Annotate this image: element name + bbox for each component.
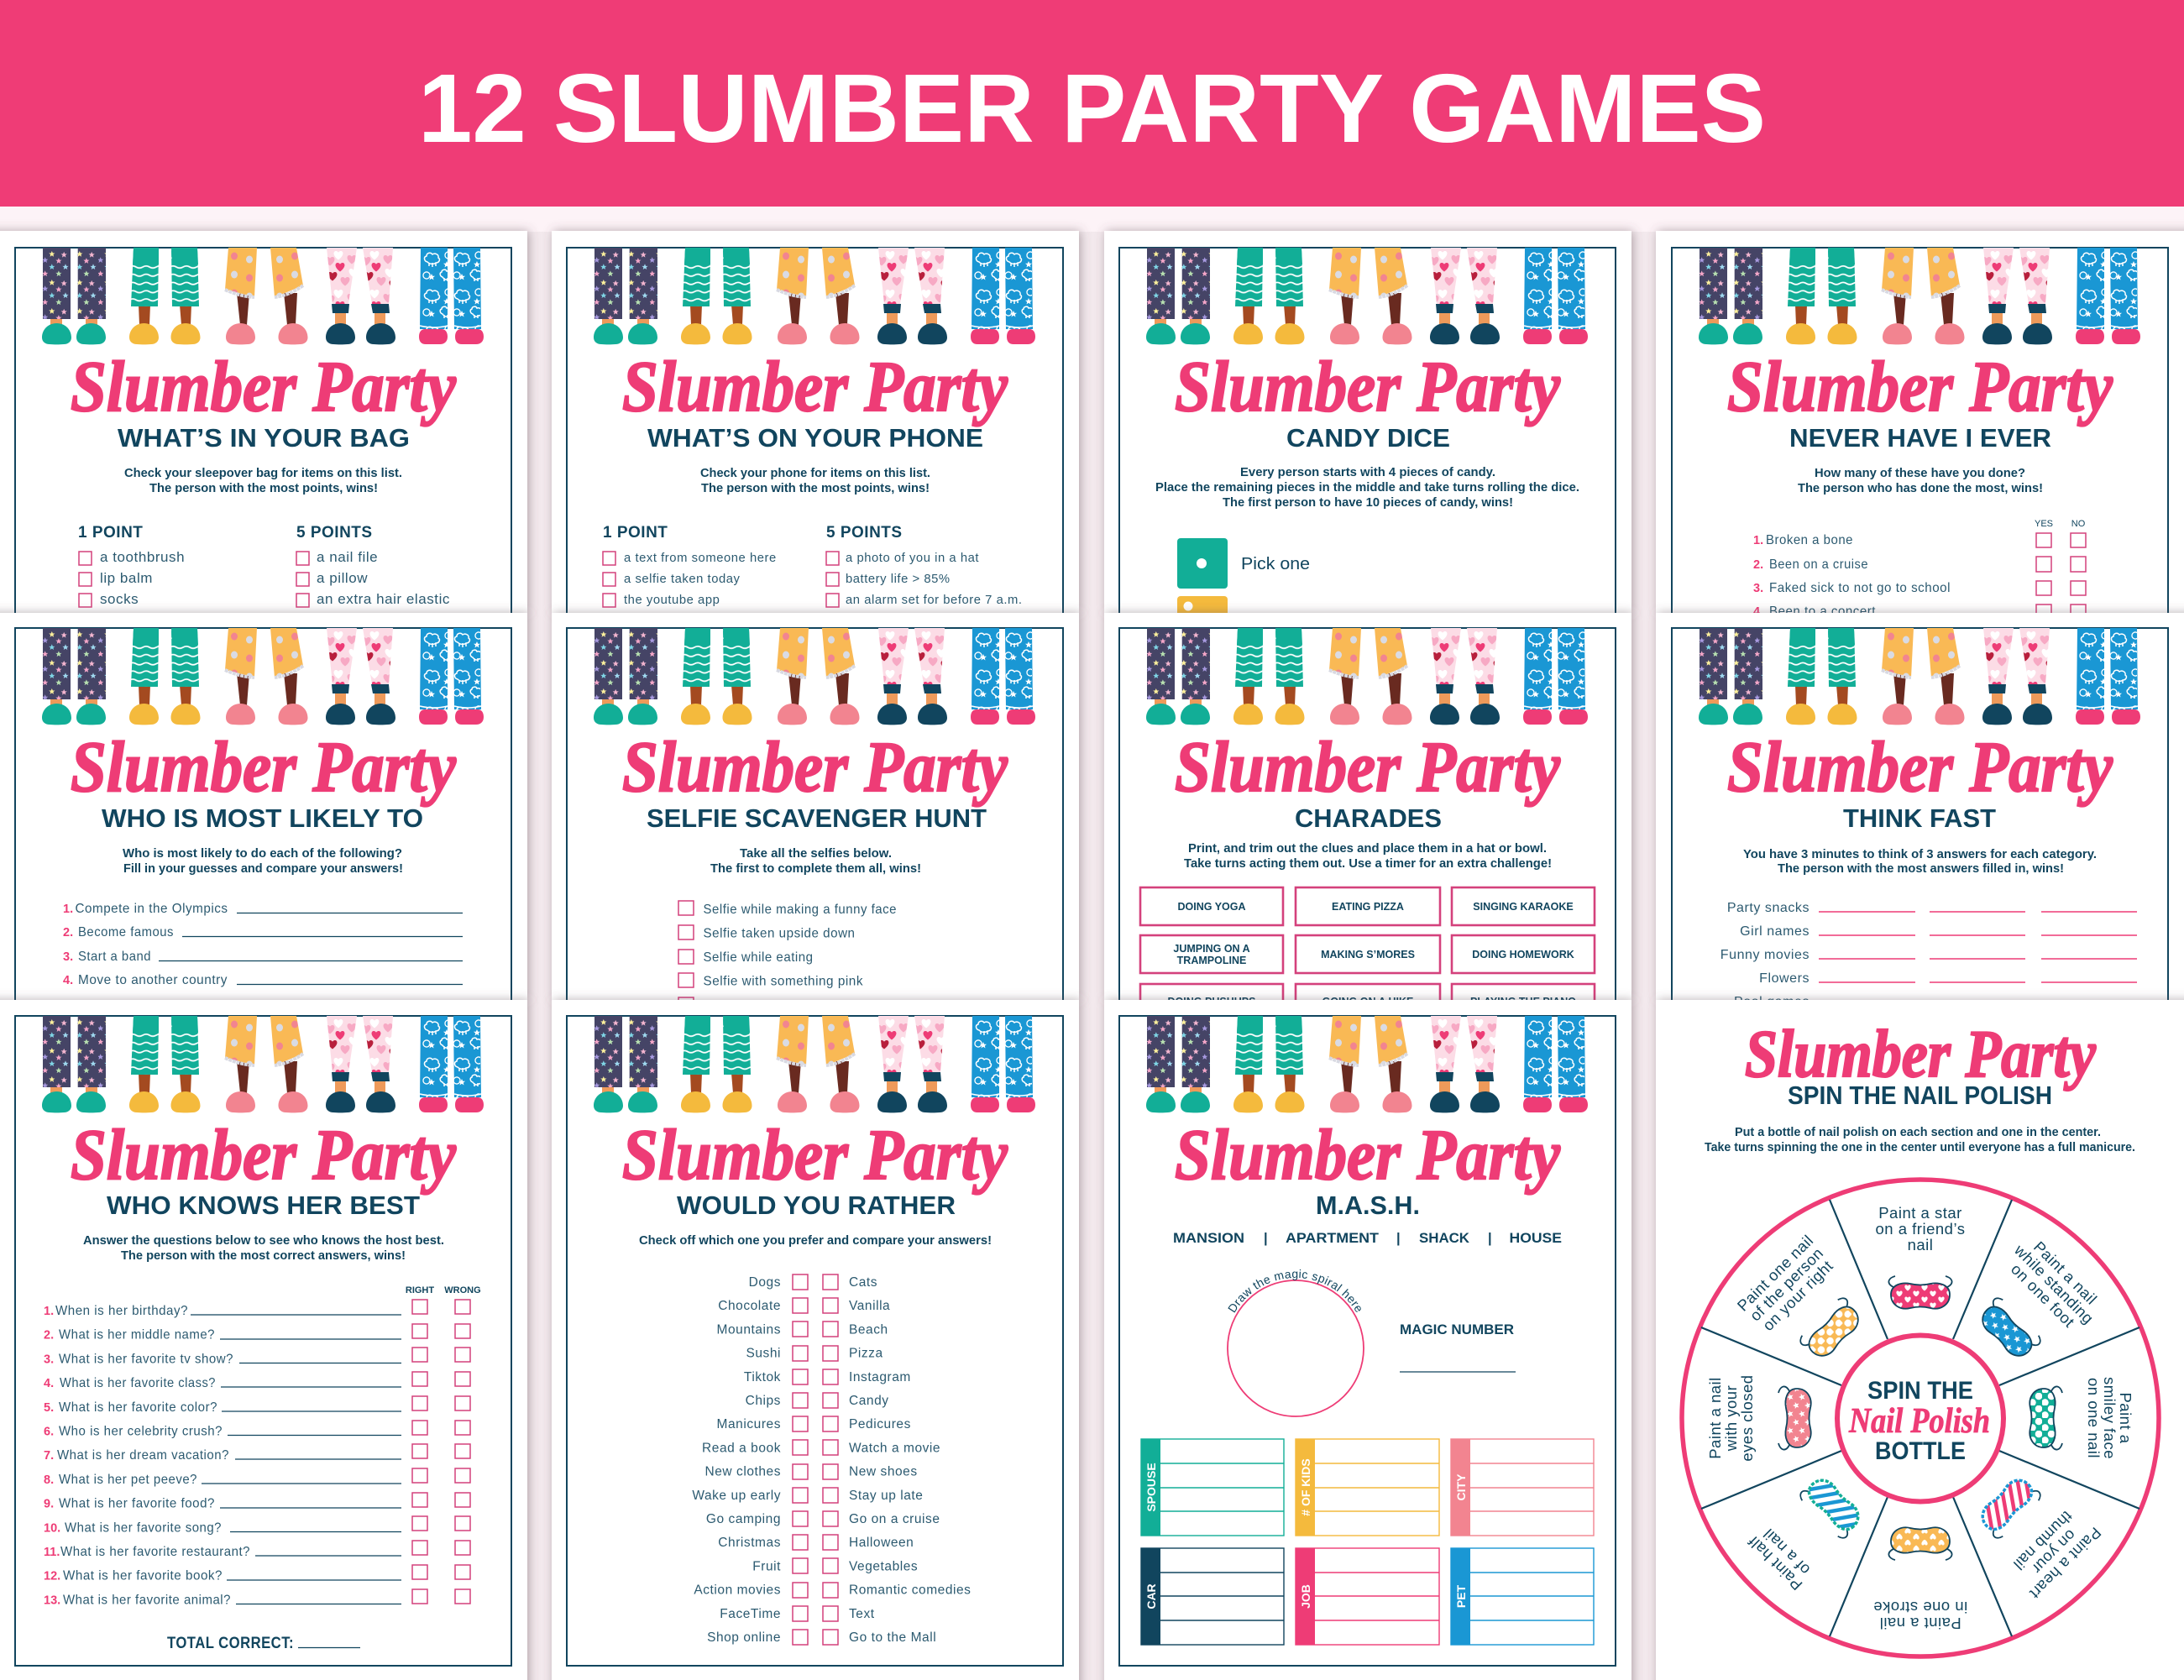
instructions: How many of these have you done? xyxy=(1815,467,2025,480)
slice: paint a smiley: on one nail xyxy=(2085,1378,2103,1458)
magic number xyxy=(1400,1322,1516,1372)
fill-in list: 4. xyxy=(63,974,73,987)
script title: Slumber Party xyxy=(71,346,457,427)
question list: 8. xyxy=(44,1473,54,1487)
instructions: Check off which one you prefer and compare your answers! xyxy=(639,1234,992,1248)
panel: who is most likely to xyxy=(0,613,527,1003)
clue cards: DOING PUSHUPS xyxy=(1168,996,1255,1007)
fill-in list: Compete in the Olympics xyxy=(76,902,228,916)
question list: What is her favorite class? xyxy=(60,1376,216,1390)
question list: 10. xyxy=(44,1521,60,1535)
slice: eyes closed: eyes closed xyxy=(1738,1374,1756,1462)
script title: Slumber Party xyxy=(622,346,1008,427)
question list: 5. xyxy=(44,1401,54,1415)
this-or-that list: Chips xyxy=(746,1394,781,1408)
pajama legs illustration xyxy=(594,628,1035,725)
slice: paint a star xyxy=(1876,1204,1965,1309)
script title: Slumber Party xyxy=(1727,346,2113,427)
instructions xyxy=(1798,467,2043,495)
clue cards: GOING ON A HIKE xyxy=(1322,996,1413,1007)
script title: Slumber Party xyxy=(1175,1114,1561,1195)
instructions xyxy=(123,847,403,876)
instructions: The person with the most correct answers, wins! xyxy=(121,1249,406,1263)
checklist: 5 points: battery life > 85% xyxy=(846,573,951,586)
script title: Slumber Party xyxy=(622,726,1008,807)
question list: 7. xyxy=(44,1449,54,1463)
question list: 1. xyxy=(44,1305,54,1318)
question list: 3. xyxy=(44,1353,54,1366)
question list: 13. xyxy=(44,1594,60,1607)
checklist: Selfie while making a funny face xyxy=(704,903,897,917)
pajama legs illustration xyxy=(594,1016,1035,1112)
slice: paint a star: nail xyxy=(1908,1236,1933,1253)
checklist: 5 points: 5 POINTS xyxy=(296,524,373,542)
panel: mash xyxy=(1100,994,1639,1680)
magic spiral circle: Draw the magic spiral here xyxy=(1228,1269,1361,1313)
clue cards: PLAYING THE PIANO xyxy=(1470,996,1576,1007)
instructions xyxy=(1705,1126,2135,1154)
instructions: The person who has done the most, wins! xyxy=(1798,482,2043,495)
this-or-that list: Go to the Mall xyxy=(849,1630,936,1645)
this-or-that list: Shop online xyxy=(707,1630,781,1645)
slice: paint half: of a nail xyxy=(1760,1526,1813,1578)
yes/no checklist: 4. xyxy=(1753,605,1763,619)
this-or-that list: Go on a cruise xyxy=(849,1512,940,1526)
checklist: Selfie with something pink xyxy=(704,974,863,989)
question list xyxy=(44,1300,470,1607)
fill-in list: Start a band xyxy=(78,950,151,964)
heading: NEVER HAVE I EVER xyxy=(1789,423,2051,453)
yes/no checklist: 1. xyxy=(1753,534,1763,547)
instructions: Every person starts with 4 pieces of candy. xyxy=(1240,466,1495,479)
checklist: 1 point: 1 POINT xyxy=(78,524,143,542)
instructions: Answer the questions below to see who knows the host best. xyxy=(83,1234,444,1248)
panel: would you rather xyxy=(552,1000,1079,1680)
checklist: 5 points: 5 POINTS xyxy=(826,524,903,542)
table: spouse xyxy=(1141,1439,1284,1536)
this-or-that list: Watch a movie xyxy=(849,1441,940,1455)
checklist: 1 point: lip balm xyxy=(100,570,153,586)
clue cards: SINGING KARAOKE xyxy=(1473,901,1574,913)
slice: paint while standing: while standing xyxy=(2010,1240,2098,1327)
wheel center: BOTTLE xyxy=(1875,1437,1966,1465)
yes/no checklist: Broken a bone xyxy=(1766,533,1853,547)
wheel center: Nail Polish xyxy=(1848,1402,1990,1441)
slice: paint while standing: on one foot xyxy=(2008,1260,2078,1331)
fill-in list: 1. xyxy=(63,903,73,916)
clue cards: JUMPING ON A xyxy=(1173,943,1250,955)
title: 12 SLUMBER PARTY GAMES xyxy=(418,54,1766,163)
table: pet: PET xyxy=(1454,1584,1468,1608)
question list: 9. xyxy=(44,1498,54,1511)
question list: What is her favorite tv show? xyxy=(59,1352,233,1366)
slice: paint a smiley: smiley face xyxy=(2101,1377,2119,1459)
this-or-that list: Fruit xyxy=(752,1559,781,1573)
fill-in list xyxy=(63,902,463,987)
this-or-that list: Go camping xyxy=(706,1512,781,1526)
checklist: 1 point xyxy=(603,524,777,607)
category rows: Flowers xyxy=(1759,971,1810,986)
panel: selfie scavenger hunt xyxy=(552,613,1079,1012)
question list: What is her favorite color? xyxy=(59,1400,217,1415)
question list: What is her favorite song? xyxy=(65,1520,222,1535)
heading: WOULD YOU RATHER xyxy=(677,1191,956,1220)
heading: WHAT’S IN YOUR BAG xyxy=(118,423,410,453)
slice: paint while standing: Paint a nail xyxy=(2030,1238,2101,1308)
heading: SELFIE SCAVENGER HUNT xyxy=(647,803,987,833)
checklist: 1 point: 1 POINT xyxy=(603,524,668,542)
script title: Slumber Party xyxy=(1745,1018,2096,1091)
script title: Slumber Party xyxy=(1175,346,1561,427)
pajama legs illustration xyxy=(1146,248,1588,344)
table: # of kids xyxy=(1296,1439,1439,1536)
magic number: MAGIC NUMBER xyxy=(1400,1322,1514,1337)
slice: paint one nail: on your right xyxy=(1759,1257,1836,1334)
question list: What is her middle name? xyxy=(59,1328,215,1342)
fill-in list: 2. xyxy=(63,926,73,939)
pajama legs illustration xyxy=(594,248,1035,344)
slice: paint a heart: thumb nail xyxy=(2010,1508,2076,1573)
panel: who knows her best xyxy=(0,1000,527,1680)
instructions: Fill in your guesses and compare your answers! xyxy=(123,862,403,876)
slice: paint a star: Paint a star xyxy=(1878,1204,1962,1222)
slice: paint a heart: on your xyxy=(2029,1526,2080,1578)
heading: CHARADES xyxy=(1295,803,1442,833)
pajama legs illustration xyxy=(1146,628,1588,725)
fill-in list: Become famous xyxy=(78,925,174,939)
this-or-that list: Candy xyxy=(849,1394,889,1408)
instructions xyxy=(83,1234,444,1263)
instructions: Take turns acting them out. Use a timer for an extra challenge! xyxy=(1184,857,1552,871)
this-or-that list: New clothes xyxy=(705,1465,781,1479)
slice: paint one nail: of the person xyxy=(1747,1244,1826,1324)
panel: spin the nail polish xyxy=(1656,1000,2184,1680)
this-or-that list: Christmas xyxy=(718,1536,781,1550)
checklist: 5 points xyxy=(826,524,1023,607)
checklist: 5 points: an alarm set for before 7 a.m. xyxy=(846,594,1023,607)
instructions xyxy=(1155,466,1579,510)
this-or-that list xyxy=(692,1274,971,1645)
slice: paint a star: on a friend’s xyxy=(1876,1220,1965,1238)
slice: eyes closed: with your xyxy=(1722,1385,1740,1452)
slice: paint a smiley: Paint a xyxy=(2117,1392,2134,1444)
pajama legs illustration xyxy=(42,248,484,344)
instructions: Take all the selfies below. xyxy=(740,847,892,861)
heading: WHO IS MOST LIKELY TO xyxy=(102,803,423,833)
category rows xyxy=(1720,901,2137,1009)
pajama legs illustration xyxy=(1699,248,2140,344)
instructions: The first to complete them all, wins! xyxy=(710,862,921,876)
this-or-that list: Chocolate xyxy=(718,1299,781,1313)
instructions: Place the remaining pieces in the middle and take turns rolling the dice. xyxy=(1155,481,1579,495)
this-or-that list: Cats xyxy=(849,1275,877,1290)
instructions: The person with the most points, wins! xyxy=(701,482,930,495)
pajama legs illustration xyxy=(42,628,484,725)
yes/no checklist: YES xyxy=(2035,519,2053,529)
this-or-that list: Beach xyxy=(849,1322,888,1337)
table: pet xyxy=(1451,1548,1594,1645)
category rows: Girl names xyxy=(1740,924,1810,939)
instructions: Take turns spinning the one in the center until everyone has a full manicure. xyxy=(1705,1141,2135,1154)
category rows: Funny movies xyxy=(1720,948,1810,962)
yes/no checklist: NO xyxy=(2071,519,2086,529)
yes/no checklist: 3. xyxy=(1753,582,1763,595)
dice: yellow xyxy=(1177,596,1228,646)
table: spouse: SPOUSE xyxy=(1144,1463,1158,1512)
this-or-that list: Vegetables xyxy=(849,1559,918,1573)
this-or-that list: Romantic comedies xyxy=(849,1583,971,1598)
table: car xyxy=(1141,1548,1284,1645)
clue cards: DOING HOMEWORK xyxy=(1472,949,1574,960)
instructions: Check your sleepover bag for items on this list. xyxy=(124,467,402,480)
instructions: The person with the most points, wins! xyxy=(149,482,378,495)
question list: What is her favorite book? xyxy=(63,1569,223,1583)
this-or-that list: Halloween xyxy=(849,1536,914,1550)
checklist: 5 points: a photo of you in a hat xyxy=(846,552,979,565)
this-or-that list: FaceTime xyxy=(720,1607,781,1621)
checklist: 1 point xyxy=(78,524,185,607)
this-or-that list: Sushi xyxy=(746,1347,781,1361)
question list: What is her dream vacation? xyxy=(57,1448,229,1463)
total correct: TOTAL CORRECT: xyxy=(167,1635,294,1652)
this-or-that list: Dogs xyxy=(749,1275,781,1290)
panel: think fast xyxy=(1656,613,2184,1009)
table: city xyxy=(1451,1439,1594,1536)
dice: pick one xyxy=(1177,538,1310,589)
instructions: Put a bottle of nail polish on each section and one in the center. xyxy=(1735,1126,2101,1139)
slice: paint one nail xyxy=(1734,1232,1878,1376)
wheel center: SPIN THE xyxy=(1867,1377,1973,1405)
magic spiral circle xyxy=(1227,1269,1364,1417)
panel: what's on your phone xyxy=(552,231,1079,621)
housing options: | xyxy=(1488,1231,1492,1246)
housing options: APARTMENT xyxy=(1286,1231,1379,1246)
slice: paint one nail: Paint one nail xyxy=(1734,1232,1817,1315)
slice: paint half xyxy=(1744,1471,1867,1594)
checklist: Selfie while eating xyxy=(704,950,813,965)
housing options: MANSION xyxy=(1173,1231,1244,1246)
question list: What is her pet peeve? xyxy=(59,1473,197,1487)
instructions xyxy=(700,467,930,495)
this-or-that list: Stay up late xyxy=(849,1489,923,1503)
top strip background xyxy=(0,207,2184,232)
category rows: Party snacks xyxy=(1727,901,1810,915)
dice: pick one: Pick one xyxy=(1241,555,1310,573)
yes/no checklist: 2. xyxy=(1753,558,1763,572)
instructions xyxy=(1184,842,1552,871)
question list: When is her birthday? xyxy=(55,1304,188,1318)
housing options xyxy=(1173,1231,1562,1246)
this-or-that list: Mountains xyxy=(717,1322,781,1337)
question list: 2. xyxy=(44,1329,54,1342)
this-or-that list: Read a book xyxy=(702,1441,781,1455)
table: job xyxy=(1296,1548,1439,1645)
heading: WHO KNOWS HER BEST xyxy=(107,1191,420,1220)
question list: 11. xyxy=(44,1546,60,1559)
checklist: 1 point: a toothbrush xyxy=(100,549,185,565)
question list: 6. xyxy=(44,1426,54,1439)
this-or-that list: Pizza xyxy=(849,1347,883,1361)
script title: Slumber Party xyxy=(1727,726,2113,807)
instructions: Who is most likely to do each of the following? xyxy=(123,847,402,861)
slice: paint half: Paint half xyxy=(1744,1532,1806,1594)
clue cards: TRAMPOLINE xyxy=(1177,955,1246,966)
category rows: Pool games xyxy=(1734,995,1810,1009)
heading: THINK FAST xyxy=(1843,803,1996,833)
checklist: Selfie taken upside down xyxy=(704,927,855,940)
slice: eyes closed xyxy=(1706,1374,1811,1462)
column labels: WRONG xyxy=(444,1285,481,1295)
instructions: Print, and trim out the clues and place them in a hat or bowl. xyxy=(1188,842,1547,856)
wheel center xyxy=(1837,1335,2003,1501)
checklist: 1 point: a text from someone here xyxy=(624,552,777,565)
fill-in list: 3. xyxy=(63,950,73,964)
question list: 12. xyxy=(44,1570,60,1583)
panel: candy dice xyxy=(1104,231,1631,646)
pajama legs illustration xyxy=(1699,628,2140,725)
housing options: | xyxy=(1264,1231,1268,1246)
instructions: You have 3 minutes to think of 3 answers for each category. xyxy=(1743,848,2097,861)
question list: What is her favorite animal? xyxy=(63,1593,231,1607)
script title: Slumber Party xyxy=(622,1114,1008,1195)
question list: What is her favorite food? xyxy=(59,1497,215,1511)
slice: paint in one stroke xyxy=(1873,1527,1967,1632)
this-or-that list: Text xyxy=(849,1607,875,1621)
this-or-that list: Pedicures xyxy=(849,1417,911,1431)
header banner xyxy=(0,0,2184,207)
this-or-that list: Action movies xyxy=(694,1583,781,1598)
script title: Slumber Party xyxy=(71,1114,457,1195)
panel: what's in your bag xyxy=(0,231,527,621)
checklist: 5 points: a nail file xyxy=(317,549,378,565)
checklist: 1 point: a selfie taken today xyxy=(624,573,741,586)
checklist: 5 points: an extra hair elastic xyxy=(317,591,450,607)
yes/no checklist: Been on a cruise xyxy=(1769,557,1868,572)
heading: SPIN THE NAIL POLISH xyxy=(1788,1081,2052,1110)
slice: paint in one stroke: Paint a nail xyxy=(1879,1615,1961,1632)
this-or-that list: Manicures xyxy=(717,1417,781,1431)
question list: 4. xyxy=(44,1377,54,1390)
yes/no checklist xyxy=(1753,519,2086,619)
this-or-that list: Vanilla xyxy=(849,1299,890,1313)
slice: paint while standing xyxy=(1961,1229,2108,1378)
slice: paint a smiley xyxy=(2029,1377,2134,1459)
slice: paint in one stroke: in one stroke xyxy=(1873,1599,1967,1616)
yes/no checklist: Faked sick to not go to school xyxy=(1769,581,1951,595)
checklist: 5 points: a pillow xyxy=(317,570,368,586)
slice: paint a heart xyxy=(1965,1463,2105,1603)
heading: M.A.S.H. xyxy=(1316,1191,1420,1220)
slice: eyes closed: Paint a nail xyxy=(1706,1377,1724,1459)
instructions: The person with the most answers filled in, wins! xyxy=(1778,862,2064,876)
this-or-that list: New shoes xyxy=(849,1465,918,1479)
clue cards: EATING PIZZA xyxy=(1332,901,1404,913)
script title: Slumber Party xyxy=(71,726,457,807)
instructions: The first person to have 10 pieces of candy, wins! xyxy=(1223,496,1513,510)
yes/no checklist: Been to a concert xyxy=(1769,604,1876,619)
pajama legs illustration xyxy=(42,1016,484,1112)
checklist xyxy=(678,901,897,1012)
heading: WHAT’S ON YOUR PHONE xyxy=(647,423,983,453)
question list: What is her favorite restaurant? xyxy=(60,1545,250,1559)
checklist: 5 points xyxy=(296,524,450,607)
pajama legs illustration xyxy=(1146,1016,1588,1112)
heading: CANDY DICE xyxy=(1286,423,1450,453)
housing options: SHACK xyxy=(1419,1231,1469,1246)
this-or-that list: Instagram xyxy=(849,1370,911,1384)
clue cards: MAKING S’MORES xyxy=(1321,949,1415,960)
instructions xyxy=(1743,848,2097,876)
question list: Who is her celebrity crush? xyxy=(59,1424,223,1439)
table: # of kids: # OF KIDS xyxy=(1299,1458,1312,1516)
fill-in list: Move to another country xyxy=(78,973,228,987)
slice: paint a heart: Paint a heart xyxy=(2026,1524,2105,1603)
checklist: 1 point: socks xyxy=(100,591,139,607)
table: city: CITY xyxy=(1454,1473,1468,1500)
this-or-that list: Wake up early xyxy=(692,1489,781,1503)
instructions xyxy=(124,467,402,495)
instructions xyxy=(710,847,921,876)
instructions: Check your phone for items on this list. xyxy=(700,467,930,480)
script title: Slumber Party xyxy=(1175,726,1561,807)
clue cards: DOING YOGA xyxy=(1177,901,1246,913)
housing options: | xyxy=(1396,1231,1401,1246)
this-or-that list: Tiktok xyxy=(744,1370,781,1384)
column labels: RIGHT xyxy=(406,1285,434,1295)
clue cards xyxy=(1140,887,1595,1022)
panel: charades xyxy=(1104,613,1631,1022)
panel: never have i ever xyxy=(1656,231,2184,621)
housing options: HOUSE xyxy=(1510,1231,1562,1246)
checklist: 1 point: the youtube app xyxy=(624,594,720,607)
table: car: CAR xyxy=(1144,1583,1158,1609)
column labels xyxy=(406,1285,481,1295)
spinner wheel xyxy=(1682,1180,2159,1656)
table: job: JOB xyxy=(1299,1584,1312,1609)
